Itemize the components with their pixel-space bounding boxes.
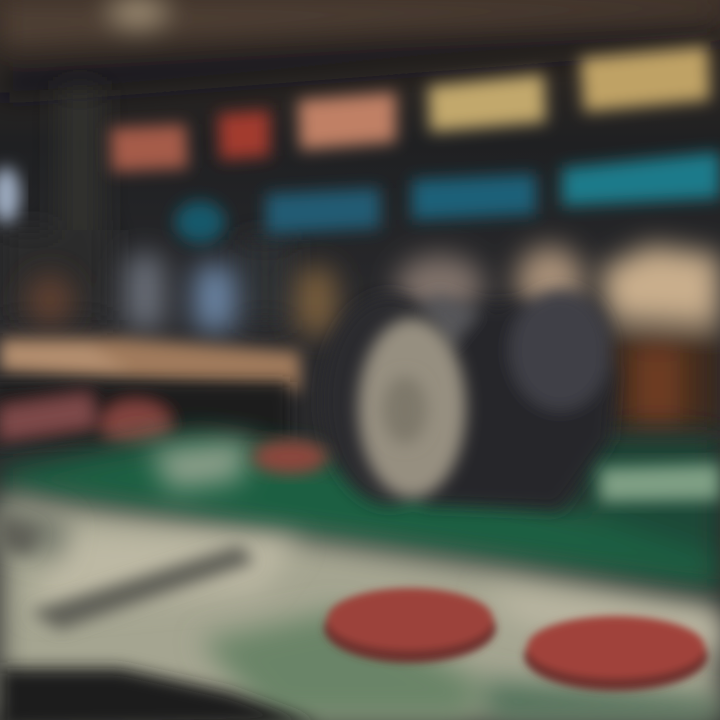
green felt patches foreground (0, 500, 720, 720)
dark foreground shadow (0, 668, 320, 720)
sign: salmon (298, 92, 396, 150)
dark diagonal card shapes (0, 515, 255, 630)
left lamp (0, 167, 20, 223)
sign: red (218, 110, 270, 160)
distant figures (26, 246, 584, 334)
sign: yellow centre (428, 74, 546, 132)
wheel white face (358, 318, 466, 498)
sign: blue left (266, 188, 380, 234)
sign: blue centre (412, 174, 536, 220)
green tag right (600, 464, 720, 502)
wheel centre (383, 376, 427, 444)
dark wall columns (0, 90, 290, 320)
upper row of glowing signs (110, 46, 710, 172)
foreground red chip right (524, 616, 708, 691)
sign: teal small (175, 201, 225, 243)
red chip on green felt (252, 440, 328, 474)
ceiling band (0, 0, 720, 95)
sign: pink-red left (110, 124, 188, 172)
roulette wheel drum (322, 290, 615, 510)
sign: teal right (562, 152, 720, 206)
left stacked chips (0, 382, 290, 446)
wooden table edge (0, 338, 300, 392)
green felt table (0, 432, 720, 590)
right crowd (600, 245, 720, 430)
sign: yellow right (580, 46, 710, 112)
lower row of teal signs (175, 152, 720, 243)
foreground red chip left (324, 588, 496, 663)
cream highlights on table (30, 530, 720, 650)
white table markings (0, 440, 720, 720)
wheel dark body (322, 290, 615, 510)
